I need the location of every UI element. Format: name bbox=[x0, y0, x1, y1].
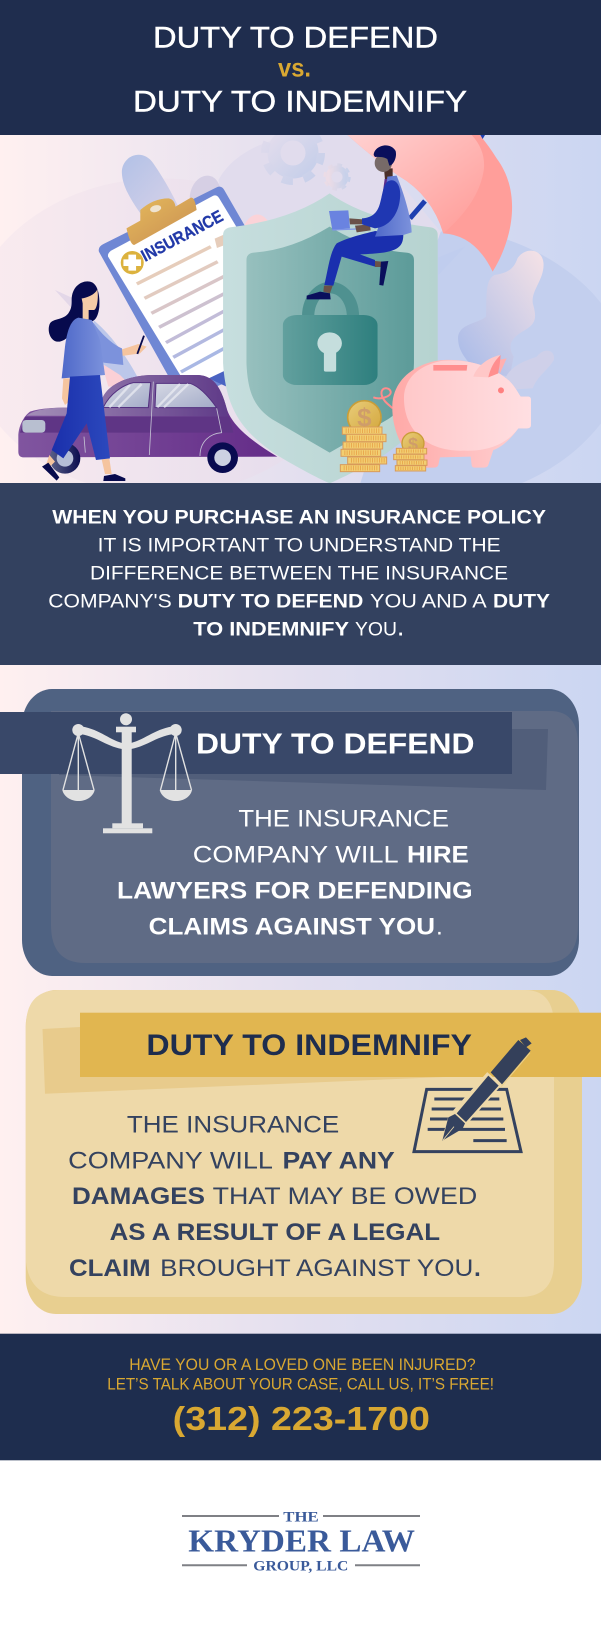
icon: pen signing document bbox=[414, 1037, 532, 1152]
call to action text: HAVE YOU OR A LOVED ONE BEEN INJURED? bbox=[129, 1356, 476, 1374]
title line one: DUTY TO DEFEND bbox=[153, 22, 438, 55]
hero illustration panel bbox=[0, 125, 601, 495]
car bbox=[18, 375, 277, 474]
body text: PAY ANY bbox=[282, 1147, 395, 1174]
umbrella bbox=[346, 133, 512, 275]
body text: COMPANY WILL bbox=[68, 1147, 273, 1174]
logo: the kryder law group: THE bbox=[283, 1509, 319, 1525]
heading banner: DUTY TO DEFEND bbox=[196, 728, 474, 760]
body text bbox=[117, 806, 473, 940]
body text: COMPANY WILL bbox=[193, 842, 399, 869]
logo: the kryder law group: KRYDER LAW bbox=[188, 1523, 415, 1559]
intro text bbox=[48, 507, 550, 641]
body text: DAMAGES bbox=[72, 1183, 205, 1210]
body text: CLAIMS AGAINST YOU bbox=[149, 913, 435, 940]
hero background blobs bbox=[218, 161, 600, 483]
body text: . bbox=[474, 1255, 481, 1282]
intro text: IT IS IMPORTANT TO UNDERSTAND THE bbox=[98, 536, 501, 557]
heading banner bbox=[80, 1013, 601, 1077]
body text: . bbox=[436, 913, 443, 940]
heading banner: DUTY TO INDEMNIFY bbox=[146, 1029, 472, 1062]
intro text: DUTY TO DEFEND bbox=[178, 592, 363, 613]
title line two: DUTY TO INDEMNIFY bbox=[133, 86, 467, 119]
intro text: . bbox=[398, 620, 403, 641]
intro text: DIFFERENCE BETWEEN THE INSURANCE bbox=[90, 564, 508, 585]
icon: small gear bbox=[325, 165, 349, 189]
intro panel bbox=[0, 483, 601, 665]
versus label: vs. bbox=[278, 53, 311, 83]
clipboard with insurance form bbox=[98, 154, 268, 386]
woman's wing shapes and car bbox=[18, 290, 277, 474]
intro text: WHEN YOU PURCHASE AN INSURANCE POLICY bbox=[52, 507, 546, 528]
large coin: $ bbox=[357, 403, 372, 433]
panel: duty to indemnify bbox=[26, 990, 601, 1314]
body text: THE INSURANCE bbox=[127, 1111, 339, 1138]
header band bbox=[0, 0, 601, 135]
woman walking bbox=[42, 281, 147, 481]
intro text: YOU AND A bbox=[370, 592, 487, 613]
body text: HIRE bbox=[407, 842, 469, 869]
coin stacks bbox=[340, 401, 427, 472]
piggy bank bbox=[373, 355, 531, 468]
body text: AS A RESULT OF A LEGAL bbox=[110, 1219, 440, 1246]
content background bbox=[0, 665, 601, 1334]
call to action footer: LET’S TALK ABOUT YOUR CASE, CALL US, IT’S FREE! bbox=[107, 1375, 494, 1393]
body text: CLAIM bbox=[69, 1255, 151, 1282]
icon: large gear bbox=[265, 125, 321, 181]
call to action footer bbox=[0, 1334, 601, 1460]
panel: duty to defend bbox=[0, 689, 579, 976]
intro text: DUTY bbox=[493, 592, 550, 613]
body text: LAWYERS FOR DEFENDING bbox=[117, 877, 473, 904]
body text: BROUGHT AGAINST YOU bbox=[160, 1255, 473, 1282]
intro text: COMPANY'S bbox=[48, 592, 172, 613]
shield with padlock bbox=[223, 193, 438, 483]
leaves behind piggy bank bbox=[458, 251, 554, 390]
phone number: (312) 223-1700 bbox=[173, 1401, 430, 1438]
clipboard label: INSURANCE bbox=[138, 207, 226, 266]
small coin: $ bbox=[408, 434, 418, 454]
logo: the kryder law group: GROUP, LLC bbox=[253, 1559, 348, 1575]
body text: THAT MAY BE OWED bbox=[213, 1183, 477, 1210]
body text: THE INSURANCE bbox=[238, 806, 449, 833]
heading banner bbox=[0, 712, 512, 774]
intro text: YOU bbox=[355, 620, 397, 641]
logo: the kryder law group bbox=[182, 1509, 420, 1575]
body text bbox=[68, 1111, 481, 1282]
man with laptop seated on shield bbox=[307, 145, 412, 299]
icon: scales of justice bbox=[62, 713, 192, 833]
padlock bbox=[283, 282, 378, 385]
intro text: TO INDEMNIFY bbox=[193, 620, 349, 641]
